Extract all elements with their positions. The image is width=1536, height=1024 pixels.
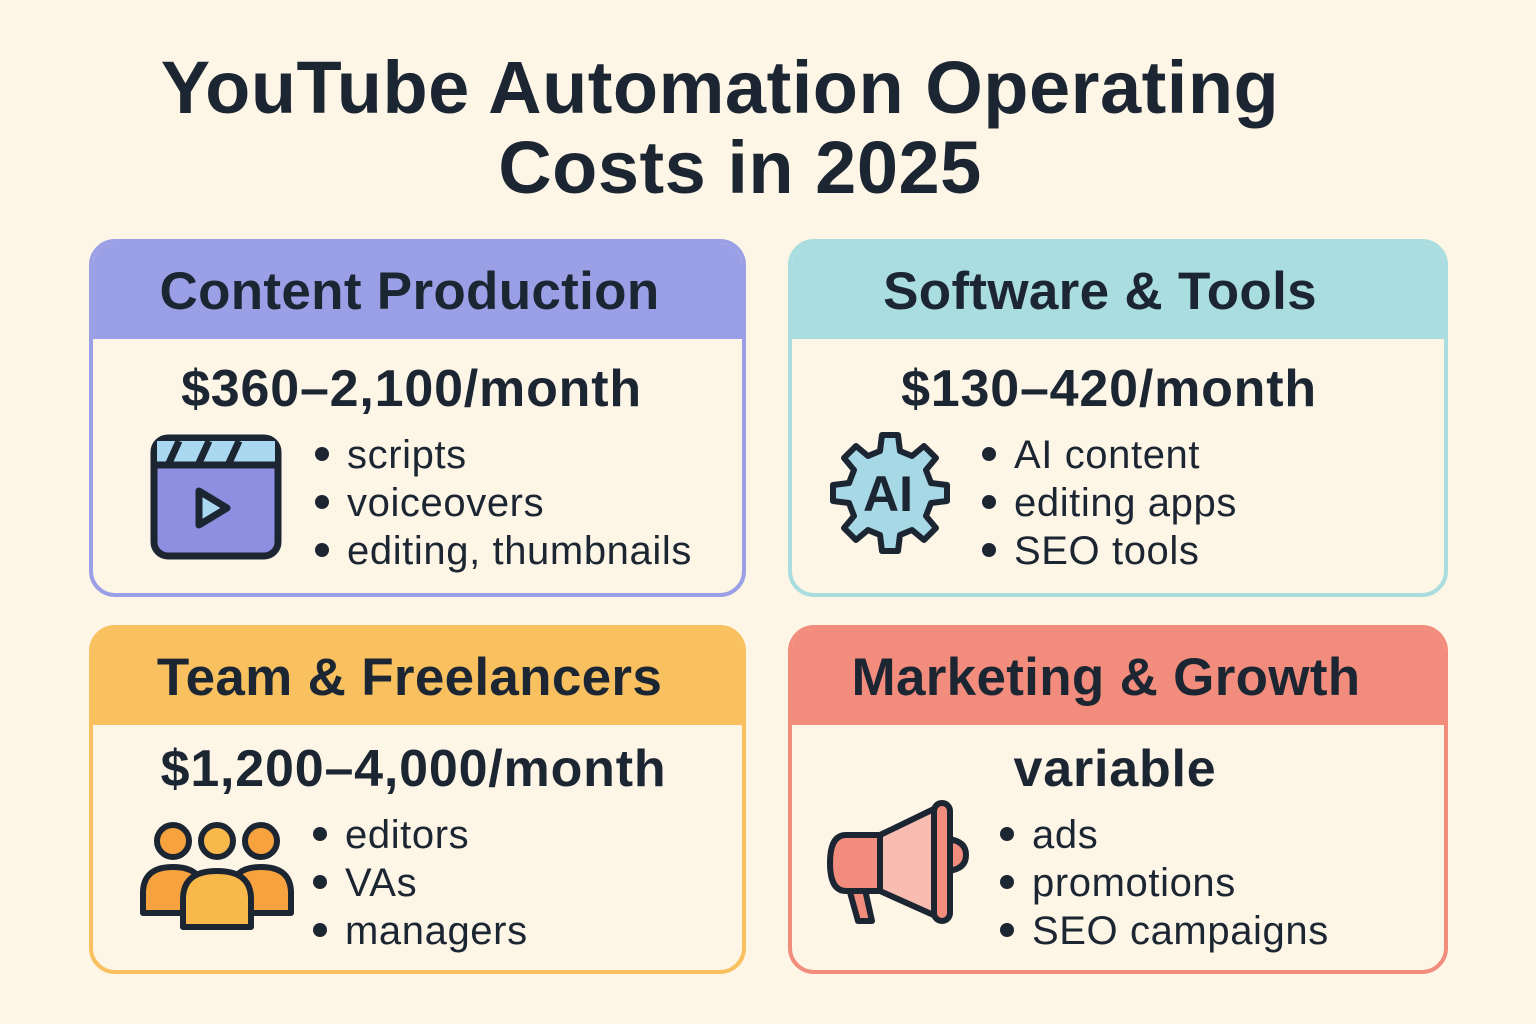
icon: AI gear: AI xyxy=(863,466,913,522)
bullets: content production: scripts xyxy=(347,433,467,477)
icon: AI gear xyxy=(830,432,950,554)
bullets: team & freelancers: editors xyxy=(345,813,469,857)
title: YouTube Automation Operating xyxy=(161,46,1279,129)
bullets: content production xyxy=(315,433,692,573)
title: Costs in 2025 xyxy=(498,126,982,209)
header: content production xyxy=(93,243,742,339)
bullets: software & tools: editing apps xyxy=(1014,481,1237,525)
bullets: team & freelancers: VAs xyxy=(345,861,417,905)
bullets: team & freelancers: managers xyxy=(345,909,528,953)
icon: video clapper xyxy=(150,434,282,560)
panel: software & tools xyxy=(788,239,1448,597)
header: team & freelancers xyxy=(93,629,742,725)
header: marketing & growth xyxy=(792,629,1444,725)
price: software & tools: $130–420/month xyxy=(901,360,1317,418)
panel: marketing & growth xyxy=(788,625,1448,974)
header: team & freelancers: Team & Freelancers xyxy=(157,648,662,706)
panel: content production xyxy=(89,239,746,597)
header: content production: Content Production xyxy=(160,262,660,320)
price: content production: $360–2,100/month xyxy=(181,360,642,418)
bullets: content production: editing, thumbnails xyxy=(347,529,692,573)
bullets: software & tools xyxy=(982,433,1237,573)
price: team & freelancers: $1,200–4,000/month xyxy=(161,740,666,798)
bullets: marketing & growth: ads xyxy=(1032,813,1098,857)
bullets: content production: voiceovers xyxy=(347,481,544,525)
header: marketing & growth: Marketing & Growth xyxy=(852,648,1360,706)
header: software & tools xyxy=(792,243,1444,339)
icon: team people xyxy=(140,822,294,930)
bullets: software & tools: SEO tools xyxy=(1014,529,1199,573)
bullets: marketing & growth: SEO campaigns xyxy=(1032,909,1329,953)
header: software & tools: Software & Tools xyxy=(883,262,1317,320)
bullets: marketing & growth: promotions xyxy=(1032,861,1236,905)
bullets: team & freelancers xyxy=(313,813,528,953)
price: marketing & growth: variable xyxy=(1014,740,1216,798)
bullets: software & tools: AI content xyxy=(1014,433,1200,477)
panel: team & freelancers xyxy=(89,625,746,974)
title xyxy=(161,46,1279,209)
icon: megaphone xyxy=(827,800,969,924)
bullets: marketing & growth xyxy=(1000,813,1329,953)
